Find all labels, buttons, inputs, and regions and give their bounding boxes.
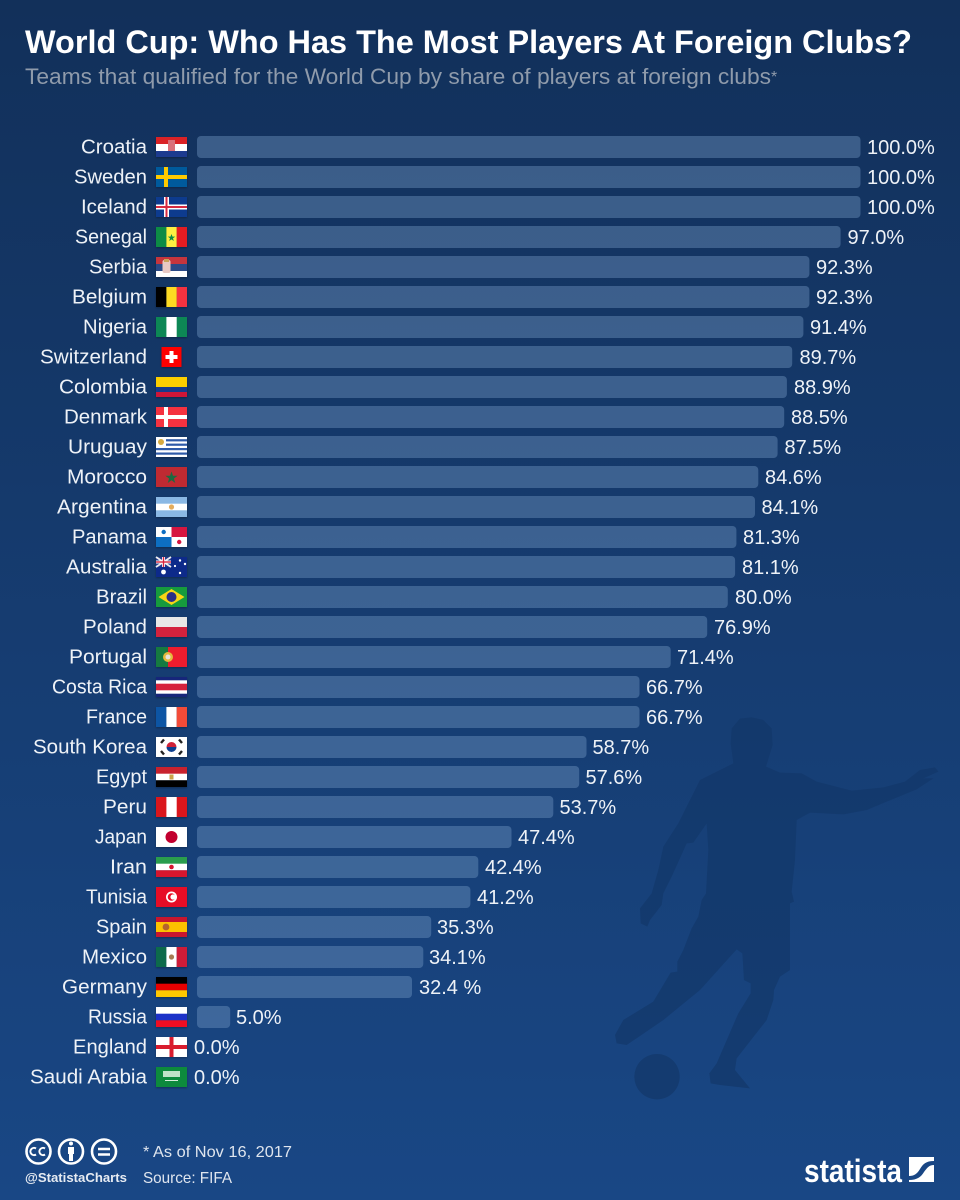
row: Uruguay — [68, 436, 841, 459]
row: Australia — [66, 556, 799, 579]
row: Belgium: 92.3% — [816, 287, 873, 309]
row: Mexico — [82, 946, 486, 969]
row: Panama: 81.3% — [743, 527, 800, 549]
flag: Nigeria — [156, 317, 187, 337]
row: Peru: 53.7% — [560, 797, 616, 819]
flag: Argentina — [156, 497, 187, 517]
row: Portugal — [69, 646, 734, 669]
flag: Sweden — [156, 167, 187, 187]
flag: Iran — [156, 857, 187, 877]
row: Australia: 81.1% — [742, 557, 799, 579]
row: Iran: Iran — [110, 856, 147, 878]
row: France — [86, 706, 703, 729]
row: Morocco: Morocco — [67, 466, 147, 488]
flag: Uruguay — [156, 437, 187, 457]
row: Russia: Russia — [88, 1006, 148, 1028]
flag: Serbia — [156, 257, 187, 277]
row: Japan: 47.4% — [518, 827, 575, 849]
row: Australia: Australia — [66, 556, 148, 578]
flag: Peru — [156, 797, 187, 817]
row: Serbia: 92.3% — [816, 257, 873, 279]
row: Iceland: 100.0% — [867, 197, 935, 219]
row: Colombia: Colombia — [59, 376, 148, 398]
row: Belgium: Belgium — [72, 286, 147, 308]
row: Germany: 32.4 % — [419, 977, 481, 999]
row: Switzerland: 89.7% — [800, 347, 856, 369]
row: Iceland: Iceland — [81, 196, 147, 218]
flag: Denmark — [156, 407, 187, 427]
row: England: England — [73, 1036, 147, 1058]
row: Egypt — [96, 766, 642, 789]
row: Switzerland — [40, 346, 856, 369]
row: Tunisia: Tunisia — [86, 886, 148, 908]
row: Panama — [72, 526, 800, 549]
row: Saudi Arabia: Saudi Arabia — [30, 1066, 148, 1088]
row: Nigeria: 91.4% — [810, 317, 867, 339]
row: Germany — [62, 976, 481, 999]
row: Morocco: 84.6% — [765, 467, 822, 489]
row: Egypt: Egypt — [96, 766, 147, 788]
row: England: 0.0% — [194, 1037, 240, 1059]
flag: Panama — [156, 527, 187, 547]
row: Brazil: Brazil — [96, 586, 147, 608]
row: Mexico: Mexico — [82, 946, 147, 968]
title: World Cup: Who Has The Most Players At Foreign Clubs? — [25, 24, 912, 60]
row: Croatia: 100.0% — [867, 137, 935, 159]
icon: creative commons licence — [26, 1140, 116, 1164]
flag: France — [156, 707, 187, 727]
subtitle: Teams that qualified for the World Cup by share of players at foreign clubs — [25, 64, 771, 89]
flag: Germany — [156, 977, 187, 997]
row: Senegal: Senegal — [75, 226, 147, 248]
row: Spain: 35.3% — [437, 917, 494, 939]
row: Argentina: Argentina — [57, 496, 148, 518]
row: Iran: 42.4% — [485, 857, 542, 879]
row: Russia: 5.0% — [236, 1007, 282, 1029]
source: Source: FIFA — [143, 1170, 232, 1187]
row: Serbia — [89, 256, 873, 279]
row: Belgium — [72, 286, 873, 309]
row: Argentina: 84.1% — [762, 497, 818, 519]
flag: Costa Rica — [156, 677, 187, 697]
row: Colombia: 88.9% — [794, 377, 851, 399]
row: France: 66.7% — [646, 707, 703, 729]
row: Senegal — [75, 226, 904, 249]
row: Senegal: 97.0% — [848, 227, 904, 249]
row: Denmark: 88.5% — [791, 407, 848, 429]
row: Peru — [103, 796, 616, 819]
flag: Colombia — [156, 377, 187, 397]
flag: Croatia — [156, 137, 187, 157]
row: Switzerland: Switzerland — [40, 346, 147, 368]
row: Poland: 76.9% — [714, 617, 771, 639]
row: Tunisia: 41.2% — [477, 887, 534, 909]
row: Nigeria: Nigeria — [83, 316, 148, 338]
flag: Iceland — [156, 197, 187, 217]
row: Spain — [96, 916, 494, 939]
row: Poland — [83, 616, 771, 639]
row: Colombia — [59, 376, 851, 399]
flag: Poland — [156, 617, 187, 637]
row: France: France — [86, 706, 147, 728]
football player silhouette — [615, 717, 938, 1099]
row: South Korea — [33, 736, 649, 759]
row: Japan — [95, 826, 575, 849]
row: Panama: Panama — [72, 526, 148, 548]
row: Brazil — [96, 586, 792, 609]
flag: Switzerland — [162, 347, 182, 367]
row: Sweden — [74, 166, 935, 189]
row: Germany: Germany — [62, 976, 148, 998]
row: South Korea: South Korea — [33, 736, 148, 758]
statista logo: statista — [804, 1153, 902, 1189]
row: Tunisia — [86, 886, 534, 909]
row: Sweden: Sweden — [74, 166, 147, 188]
row: Nigeria — [83, 316, 867, 339]
row: Egypt: 57.6% — [586, 767, 642, 789]
row: Denmark — [64, 406, 848, 429]
flag: Saudi Arabia — [156, 1067, 187, 1087]
row: Morocco — [67, 466, 822, 489]
row: Saudi Arabia: 0.0% — [194, 1067, 240, 1089]
bar chart — [30, 136, 935, 1089]
row: Croatia: Croatia — [81, 136, 148, 158]
flag: Brazil — [156, 587, 187, 607]
flag: Spain — [156, 917, 187, 937]
row: Sweden: 100.0% — [867, 167, 935, 189]
flag: South Korea — [156, 737, 187, 757]
row: Uruguay: Uruguay — [68, 436, 148, 458]
row: Croatia — [81, 136, 935, 159]
flag: Mexico — [156, 947, 187, 967]
footnote: * As of Nov 16, 2017 — [143, 1144, 292, 1161]
flag: Belgium — [156, 287, 187, 307]
row: Japan: Japan — [95, 826, 147, 848]
row: Poland: Poland — [83, 616, 147, 638]
row: Saudi Arabia — [30, 1066, 240, 1089]
row: Iran — [110, 856, 542, 879]
flag: Tunisia — [156, 887, 187, 907]
flag: Russia — [156, 1007, 187, 1027]
row: Costa Rica: Costa Rica — [52, 676, 148, 698]
row: Costa Rica: 66.7% — [646, 677, 703, 699]
row: Portugal: 71.4% — [677, 647, 734, 669]
row: Mexico: 34.1% — [429, 947, 486, 969]
row: Portugal: Portugal — [69, 646, 147, 668]
social handle: @StatistaCharts — [25, 1170, 127, 1185]
flag: Senegal — [156, 227, 187, 247]
row: South Korea: 58.7% — [592, 737, 649, 759]
row: Iceland — [81, 196, 935, 219]
row: Brazil: 80.0% — [735, 587, 792, 609]
flag: Morocco — [156, 467, 187, 487]
flag: Australia — [156, 557, 187, 577]
row: Serbia: Serbia — [89, 256, 148, 278]
flag: Japan — [156, 827, 187, 847]
row: Denmark: Denmark — [64, 406, 148, 428]
row: England — [73, 1036, 240, 1059]
row: Spain: Spain — [96, 916, 147, 938]
row: Uruguay: 87.5% — [784, 437, 841, 459]
row: Costa Rica — [52, 676, 703, 699]
flag: England — [156, 1037, 187, 1057]
row: Argentina — [57, 496, 818, 519]
subtitle: * — [771, 69, 777, 86]
row: Peru: Peru — [103, 796, 147, 818]
row: Russia — [88, 1006, 282, 1029]
flag: Portugal — [156, 647, 187, 667]
flag: Egypt — [156, 767, 187, 787]
